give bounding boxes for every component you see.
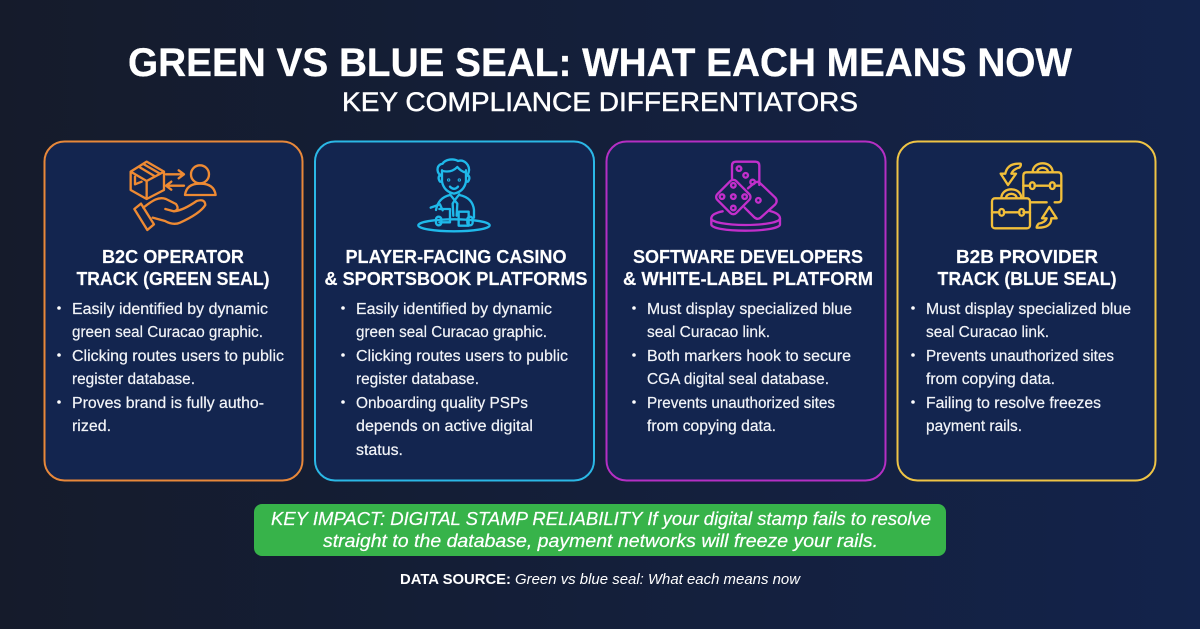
bullet list: green seal Curacao graphic. <box>72 324 263 341</box>
bullet list <box>911 301 1131 435</box>
bullet list: Proves brand is fully autho- <box>72 395 264 412</box>
bullet list: Clicking routes users to public <box>356 348 568 365</box>
bullet list: Clicking routes users to public <box>72 348 284 365</box>
bullet list: register database. <box>72 371 195 388</box>
bullet list: status. <box>356 442 403 459</box>
icon: dice on a pedestal <box>711 162 780 231</box>
callout: key impact <box>254 504 946 556</box>
panel: player-facing platforms <box>315 142 594 480</box>
subtitle: KEY COMPLIANCE DIFFERENTIATORS <box>342 87 858 117</box>
bullet list <box>632 301 852 435</box>
bullet list: Prevents unauthorized sites <box>926 348 1114 365</box>
bullet list: from copying data. <box>647 418 776 435</box>
bullet list: Must display specialized blue <box>926 301 1131 318</box>
title: GREEN VS BLUE SEAL: WHAT EACH MEANS NOW <box>128 41 1072 85</box>
heading: B2C OPERATOR <box>102 247 244 267</box>
heading: & SPORTSBOOK PLATFORMS <box>324 269 588 289</box>
data source: DATA SOURCE: <box>400 571 511 588</box>
icon: parcel exchange over hand <box>131 162 216 230</box>
panel: B2C operator track <box>44 142 302 480</box>
heading: SOFTWARE DEVELOPERS <box>633 247 863 267</box>
data source: Green vs blue seal: What each means now <box>515 571 801 588</box>
heading <box>324 247 588 289</box>
heading: & WHITE-LABEL PLATFORM <box>623 269 873 289</box>
bullet list: depends on active digital <box>356 418 533 435</box>
panel: B2B provider track <box>898 142 1156 480</box>
icon: casino dealer at table <box>418 159 490 231</box>
heading <box>623 247 873 289</box>
heading <box>938 247 1116 289</box>
bullet list: seal Curacao link. <box>926 324 1049 341</box>
heading: TRACK (GREEN SEAL) <box>76 269 270 289</box>
bullet list: Both markers hook to secure <box>647 348 851 365</box>
callout: key impact: KEY IMPACT: DIGITAL STAMP RELIABILITY If your digital stamp fails to resolve <box>271 509 931 529</box>
bullet list <box>57 301 284 435</box>
heading: B2B PROVIDER <box>956 247 1098 267</box>
bullet list: seal Curacao link. <box>647 324 770 341</box>
bullet list: register database. <box>356 371 479 388</box>
bullet list: Prevents unauthorized sites <box>647 395 835 412</box>
bullet list: Failing to resolve freezes <box>926 395 1101 412</box>
panel: software developers <box>606 142 886 480</box>
bullet list: green seal Curacao graphic. <box>356 324 547 341</box>
bullet list: Must display specialized blue <box>647 301 852 318</box>
bullet list: Onboarding quality PSPs <box>356 395 528 412</box>
icon: exchanging briefcases <box>992 163 1061 228</box>
heading: TRACK (BLUE SEAL) <box>938 269 1116 289</box>
callout: key impact: straight to the database, payment networks will freeze your rails. <box>323 531 878 551</box>
bullet list: payment rails. <box>926 418 1022 435</box>
heading: PLAYER-FACING CASINO <box>346 247 566 267</box>
bullet list: Easily identified by dynamic <box>356 301 552 318</box>
bullet list: from copying data. <box>926 371 1055 388</box>
bullet list: Easily identified by dynamic <box>72 301 268 318</box>
bullet list <box>341 301 568 459</box>
heading <box>76 247 270 289</box>
bullet list: rized. <box>72 418 111 435</box>
bullet list: CGA digital seal database. <box>647 371 829 388</box>
